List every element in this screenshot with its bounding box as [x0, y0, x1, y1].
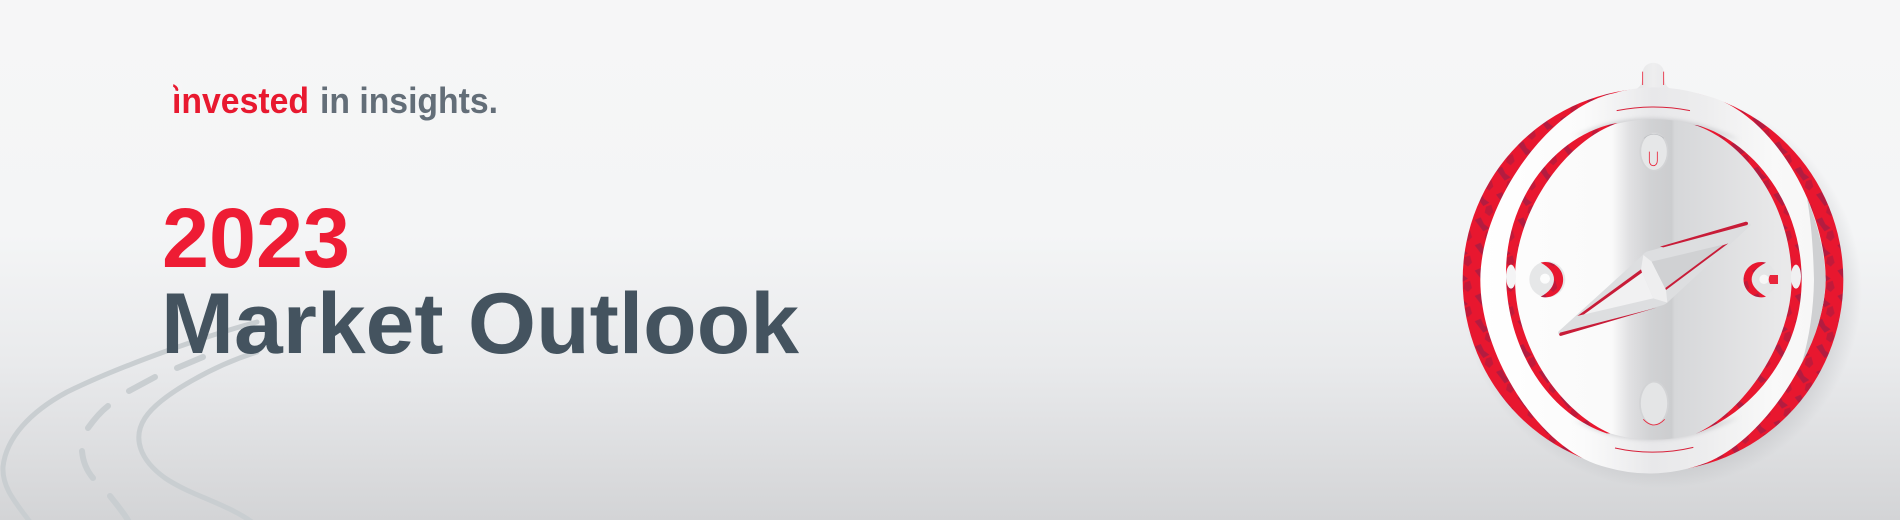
title: 2023 Market Outlook: Market Outlook — [161, 276, 799, 372]
icon: compass — [1462, 63, 1862, 488]
tagline: invested in insights — [171, 80, 498, 121]
tagline: invested in insights: invested — [172, 80, 309, 121]
tagline: invested in insights: in insights. — [320, 80, 498, 121]
title: 2023 Market Outlook — [161, 191, 799, 372]
title: 2023 Market Outlook: 2023 — [162, 191, 350, 285]
winding road illustration — [3, 322, 257, 520]
